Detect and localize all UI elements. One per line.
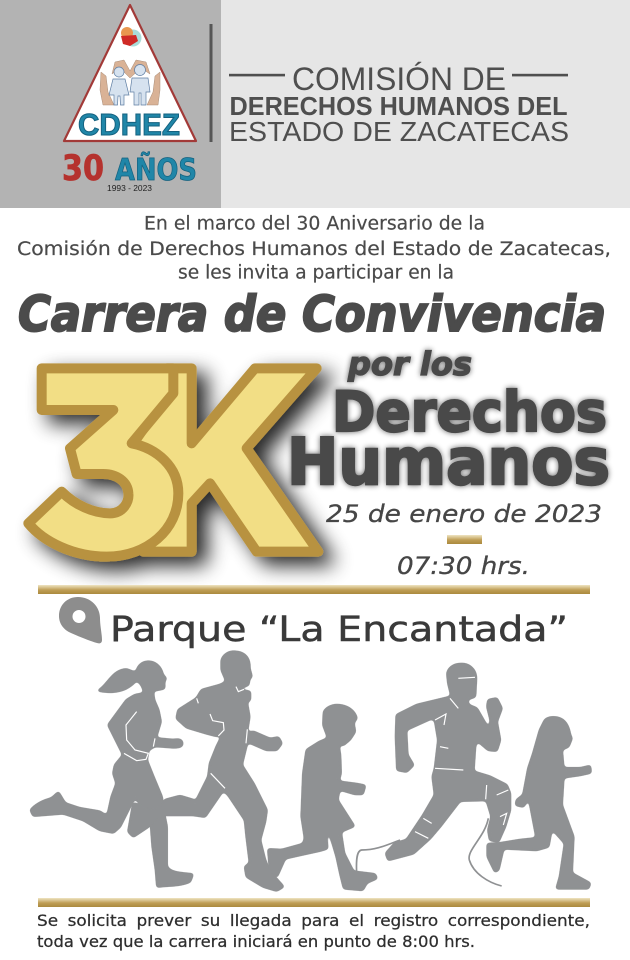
icon: location pin [59,597,102,643]
header title: DERECHOS HUMANOS DEL [230,93,568,121]
intro text: En el marco del 30 Aniversario de la [144,214,485,234]
icon: protective hands [100,60,160,105]
letter K [133,368,318,552]
venue name: Parque “La Encantada” [110,610,568,650]
header title: COMISIÓN DE [292,61,506,97]
footer note: Se solicita prever su llegada para el registro correspondiente, [37,911,590,930]
gold tick divider [447,535,482,544]
subheading: por los Derechos Humanos: por los [347,345,472,383]
header title: ESTADO DE ZACATECAS [229,116,569,147]
runner: girl [488,717,591,888]
logo: 30 años: 1993 - 2023 [107,184,153,193]
header band [0,0,630,208]
runner: man [128,652,283,891]
subheading: por los Derechos Humanos: Humanos [287,426,610,500]
logo: 30 años [62,149,197,193]
runner: amputee athlete [356,664,510,886]
event date: 25 de enero de 2023 [326,500,602,528]
runner: woman [31,662,193,887]
logo wordmark: CDHEZ [78,107,180,142]
footer note [37,911,590,951]
event time: 07:30 hrs. [397,552,530,580]
intro text [17,214,611,284]
runners silhouettes [31,652,591,891]
logo: CDHEZ triangle [64,5,196,142]
icon: sun emblem [121,27,142,46]
runner: boy [268,705,377,890]
logo: 30 años: AÑOS [115,151,197,188]
gold rule bottom [38,898,590,907]
big 3K graphic [28,368,318,557]
letter 3 [28,368,178,557]
gold rule [38,585,590,594]
intro text: Comisión de Derechos Humanos del Estado de Zacatecas, [17,239,611,260]
footer note: toda vez que la carrera iniciará en punto de 8:00 hrs. [37,932,475,951]
subheading: por los Derechos Humanos [287,345,610,500]
icon: two people [109,64,150,105]
header title [229,61,569,147]
subheading: por los Derechos Humanos: Derechos [332,380,607,444]
logo: 30 años: 30 [62,149,104,189]
intro text: se les invita a participar en la [178,262,454,284]
